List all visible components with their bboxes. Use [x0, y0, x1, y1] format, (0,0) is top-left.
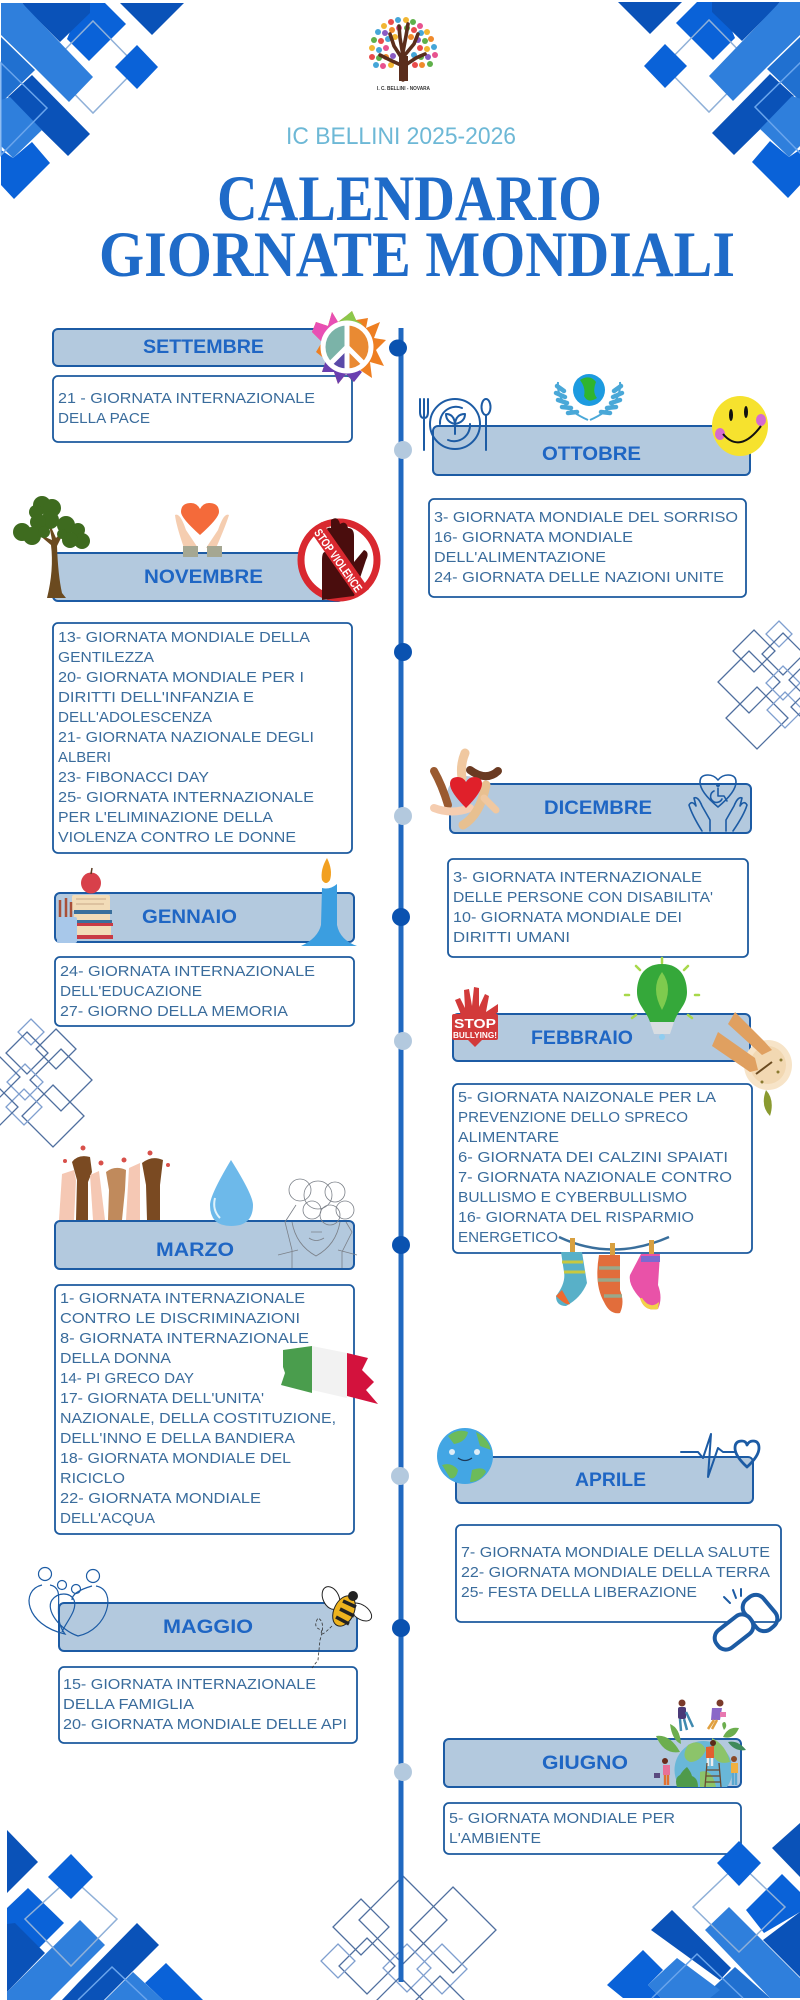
list: gennaio: DELL'EDUCAZIONE [60, 983, 202, 1000]
heading: dicembre [450, 784, 751, 833]
figure: woman on top [708, 1700, 726, 1729]
heading: ottobre: OTTOBRE [542, 443, 641, 465]
decoration: bottom centre diamonds [321, 1876, 496, 2000]
heading: maggio: MAGGIO [163, 1616, 253, 1638]
icon: books and apple [57, 868, 113, 943]
list: novembre [53, 623, 352, 853]
heading: dicembre: DICEMBRE [544, 797, 652, 819]
icon: peace sign [312, 311, 386, 384]
heading: aprile: APRILE [575, 1469, 646, 1491]
list: marzo: NAZIONALE, DELLA COSTITUZIONE, [60, 1410, 336, 1427]
list: marzo: DELLA DONNA [60, 1350, 171, 1367]
heading: ottobre [433, 426, 750, 475]
list: novembre: 25- GIORNATA INTERNAZIONALE [58, 789, 314, 806]
icon: bee with dashed trail [312, 1584, 375, 1668]
decoration: left side diamonds [0, 1019, 92, 1147]
subtitle: IC BELLINI 2025-2026 [286, 123, 516, 150]
panel: gennaio [55, 858, 357, 1026]
icon: green light bulb [625, 958, 699, 1040]
heading: gennaio: GENNAIO [142, 906, 237, 928]
list: aprile: 25- FESTA DELLA LIBERAZIONE [461, 1584, 697, 1601]
icon: water drop [210, 1160, 253, 1226]
list: febbraio: 16- GIORNATA DEL RISPARMIO [458, 1209, 694, 1226]
heading: marzo [55, 1221, 354, 1269]
panel: dicembre [434, 753, 751, 957]
icon: UN globe and wreath [556, 374, 622, 420]
icon: stop bullying [452, 987, 498, 1047]
list: settembre [53, 376, 352, 442]
panel: maggio [29, 1568, 375, 1743]
list: marzo: CONTRO LE DISCRIMINAZIONI [60, 1310, 300, 1327]
icon: broken chain [711, 1589, 781, 1654]
list: febbraio [453, 1084, 752, 1253]
list: novembre: 23- FIBONACCI DAY [58, 769, 209, 786]
list: gennaio: 24- GIORNATA INTERNAZIONALE [60, 963, 315, 980]
icon: stop violence: STOP VIOLENCE [311, 526, 365, 595]
panel: marzo [55, 1146, 378, 1534]
decoration: right side diamonds [718, 621, 800, 749]
list: ottobre: 16- GIORNATA MONDIALE [434, 529, 633, 546]
list: ottobre: 24- GIORNATA DELLE NAZIONI UNITE [434, 569, 724, 586]
panel: settembre [53, 311, 386, 442]
list: novembre: PER L'ELIMINAZIONE DELLA [58, 809, 273, 826]
heading: settembre [53, 329, 343, 366]
list: dicembre [448, 859, 748, 957]
list: gennaio [55, 957, 354, 1026]
figure: girl left [654, 1758, 670, 1785]
list: novembre: GENTILEZZA [58, 649, 154, 666]
decoration: top-left corner shapes [1, 3, 184, 199]
list: novembre: 21- GIORNATA NAZIONALE DEGLI [58, 729, 314, 746]
list: marzo: 17- GIORNATA DELL'UNITA' [60, 1390, 264, 1407]
icon: line art woman [278, 1179, 357, 1268]
title: CALENDARIO [217, 163, 602, 235]
icon: italian flag [281, 1346, 378, 1404]
list: novembre: DIRITTI DELL'INFANZIA E [58, 689, 254, 706]
list: novembre: VIOLENZA CONTRO LE DONNE [58, 829, 296, 846]
list: settembre: DELLA PACE [58, 410, 150, 427]
list: febbraio: ENERGETICO [458, 1229, 558, 1246]
list: novembre: DELL'ADOLESCENZA [58, 709, 212, 726]
icon: raised fists [59, 1146, 170, 1220]
icon: hands around heart [434, 753, 498, 825]
decoration: bottom-left corner shapes [7, 1830, 203, 2000]
panel: febbraio [452, 958, 792, 1313]
list: febbraio: PREVENZIONE DELLO SPRECO [458, 1109, 688, 1126]
icon: disability hands [689, 775, 747, 831]
logo: tree of hands [369, 17, 438, 92]
list: maggio: 20- GIORNATA MONDIALE DELLE API [63, 1716, 347, 1733]
list: ottobre: DELL'ALIMENTAZIONE [434, 549, 606, 566]
list: novembre: ALBERI [58, 749, 111, 766]
list: maggio [59, 1667, 357, 1743]
list: novembre: 20- GIORNATA MONDIALE PER I [58, 669, 304, 686]
list: marzo: 14- PI GRECO DAY [60, 1370, 194, 1387]
heading: aprile [456, 1457, 753, 1503]
icon: stop bullying: STOP [454, 1016, 496, 1031]
title [99, 163, 735, 291]
list: febbraio: BULLISMO E CYBERBULLISMO [458, 1189, 687, 1206]
list: giugno: L'AMBIENTE [449, 1830, 541, 1847]
heading: maggio [59, 1603, 357, 1651]
icon: heartbeat heart [681, 1434, 759, 1477]
decoration: bottom-right corner shapes [607, 1823, 800, 1998]
list: aprile [456, 1525, 781, 1622]
list: ottobre [429, 499, 746, 597]
heading: novembre [53, 553, 343, 601]
icon: memorial candle [301, 858, 357, 946]
heading: giugno: GIUGNO [542, 1752, 628, 1774]
figure: man on top [678, 1700, 693, 1731]
list: novembre: 13- GIORNATA MONDIALE DELLA [58, 629, 310, 646]
panel: novembre [13, 496, 377, 853]
list: aprile: 7- GIORNATA MONDIALE DELLA SALUTE [461, 1544, 770, 1561]
icon: stop violence [301, 518, 377, 600]
list: marzo [55, 1285, 354, 1534]
icon: hands holding heart [175, 503, 229, 557]
list: dicembre: 3- GIORNATA INTERNAZIONALE [453, 869, 702, 886]
heading: marzo: MARZO [156, 1239, 234, 1261]
list: maggio: 15- GIORNATA INTERNAZIONALE [63, 1676, 316, 1693]
heading: febbraio [453, 1014, 750, 1061]
panel: ottobre [420, 374, 768, 597]
list: marzo: 1- GIORNATA INTERNAZIONALE [60, 1290, 305, 1307]
icon: family outline [29, 1568, 108, 1636]
list: ottobre: 3- GIORNATA MONDIALE DEL SORRISO [434, 509, 738, 526]
heading: febbraio: FEBBRAIO [531, 1027, 633, 1049]
list: marzo: 8- GIORNATA INTERNAZIONALE [60, 1330, 309, 1347]
icon: plate and cutlery [420, 399, 490, 450]
icon: tree [13, 496, 90, 598]
list: marzo: DELL'ACQUA [60, 1510, 155, 1527]
timeline axis [389, 328, 412, 1982]
list: marzo: 22- GIORNATA MONDIALE [60, 1490, 261, 1507]
decoration: top-right corner shapes [618, 2, 800, 198]
logo caption: I. C. BELLINI - NOVARA [377, 86, 430, 92]
heading: giugno [444, 1739, 741, 1787]
list: giugno [444, 1803, 741, 1854]
icon: people caring for earth [654, 1700, 746, 1787]
list: maggio: DELLA FAMIGLIA [63, 1696, 194, 1713]
icon: smiley [712, 396, 768, 456]
list: aprile: 22- GIORNATA MONDIALE DELLA TERRA [461, 1564, 770, 1581]
icon: stop bullying: BULLYING! [453, 1031, 497, 1040]
panel: aprile [437, 1428, 781, 1654]
figure: person on ladder [705, 1740, 721, 1787]
panel: giugno [444, 1700, 746, 1854]
list: gennaio: 27- GIORNO DELLA MEMORIA [60, 1003, 288, 1020]
list: febbraio: 7- GIORNATA NAZIONALE CONTRO [458, 1169, 732, 1186]
heading: settembre: SETTEMBRE [143, 336, 264, 358]
heading: gennaio [55, 893, 354, 942]
list: marzo: 18- GIORNATA MONDIALE DEL [60, 1450, 291, 1467]
icon: odd socks on a line [556, 1237, 669, 1313]
list: dicembre: 10- GIORNATA MONDIALE DEI [453, 909, 682, 926]
list: marzo: DELL'INNO E DELLA BANDIERA [60, 1430, 295, 1447]
icon: hands scraping plate [712, 1012, 792, 1116]
list: giugno: 5- GIORNATA MONDIALE PER [449, 1810, 675, 1827]
list: marzo: RICICLO [60, 1470, 125, 1487]
icon: smiling earth [437, 1428, 493, 1484]
figure: boy right [731, 1756, 738, 1785]
list: dicembre: DELLE PERSONE CON DISABILITA' [453, 889, 713, 906]
list: settembre: 21 - GIORNATA INTERNAZIONALE [58, 390, 315, 407]
list: febbraio: 6- GIORNATA DEI CALZINI SPAIATI [458, 1149, 728, 1166]
heading: novembre: NOVEMBRE [144, 566, 263, 588]
list: febbraio: ALIMENTARE [458, 1129, 559, 1146]
title: GIORNATE MONDIALI [99, 219, 735, 291]
list: dicembre: DIRITTI UMANI [453, 929, 570, 946]
list: febbraio: 5- GIORNATA NAIZONALE PER LA [458, 1089, 716, 1106]
